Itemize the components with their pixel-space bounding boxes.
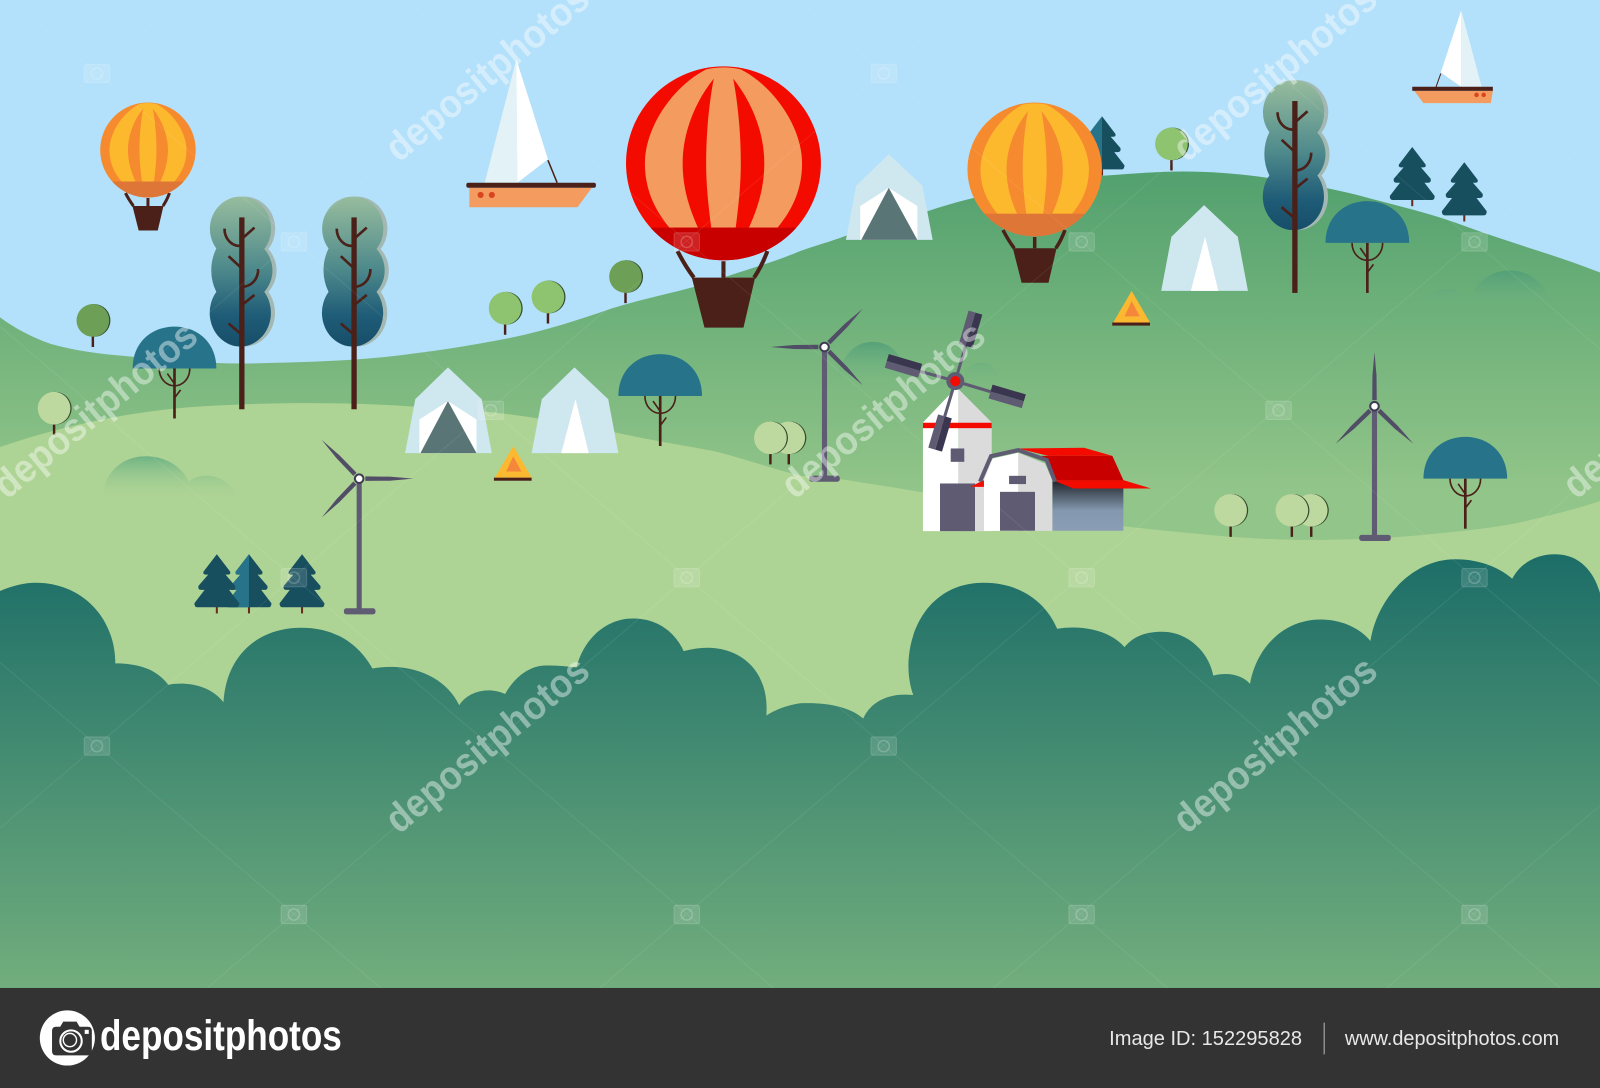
hull bbox=[1414, 91, 1493, 103]
wind turbine centre bbox=[770, 307, 864, 482]
sail bbox=[1441, 10, 1461, 87]
logo wordmark: depositphotos bbox=[100, 1012, 342, 1060]
wind turbine right bbox=[1334, 352, 1415, 541]
barn side wall bbox=[1052, 480, 1123, 531]
round tree bbox=[609, 260, 643, 303]
round tree front bbox=[1276, 494, 1309, 537]
windmill sails bbox=[885, 311, 1026, 452]
round tree bbox=[1214, 494, 1248, 537]
spruce trees: upper right group bbox=[1080, 116, 1487, 221]
round tree bbox=[1155, 128, 1189, 170]
watermark middle: depositphotos bbox=[773, 313, 994, 507]
parasol tree 2 bbox=[618, 354, 702, 446]
spruce bbox=[1390, 147, 1435, 206]
tent with dark door, lower left bbox=[405, 367, 492, 453]
barn red roof bbox=[970, 448, 1151, 488]
spruce left bbox=[194, 554, 239, 613]
hot air balloon: medium orange bbox=[967, 103, 1102, 283]
website url: www.depositphotos.com bbox=[1344, 1028, 1559, 1050]
watermark bottom right: depositphotos bbox=[1164, 648, 1386, 842]
spruce middle bbox=[227, 554, 271, 613]
campfire right bbox=[1112, 291, 1150, 326]
footer bar bbox=[0, 988, 1600, 1088]
sailboat small bbox=[1412, 10, 1493, 103]
foreground forest silhouette bbox=[0, 554, 1600, 988]
wind turbine left bbox=[320, 438, 413, 614]
parasol tree 4 bbox=[1423, 437, 1507, 529]
round tree bbox=[77, 304, 110, 347]
round tree back bbox=[772, 422, 806, 464]
spruce hidden behind balloon bbox=[1080, 116, 1124, 176]
round tree bbox=[532, 281, 566, 324]
barn front gable bbox=[980, 450, 1055, 531]
tent, lower left bbox=[532, 367, 618, 453]
watermark bottom centre: depositphotos bbox=[377, 648, 598, 842]
round tree bbox=[38, 392, 72, 435]
campfire left bbox=[494, 446, 532, 481]
front hill bbox=[0, 403, 1600, 817]
poplar tree 1 bbox=[210, 197, 277, 409]
poplar tree 3 bbox=[1263, 80, 1330, 293]
small round trees bbox=[38, 128, 1329, 537]
mound: centre bbox=[837, 342, 1001, 380]
round tree back bbox=[1295, 494, 1329, 537]
back hill bbox=[0, 171, 1600, 572]
image id: Image ID: 152295828 bbox=[1109, 1028, 1302, 1050]
sail bbox=[485, 59, 517, 183]
mound: left bbox=[102, 456, 240, 502]
watermark camera icons bbox=[84, 64, 1487, 924]
background mounds bbox=[102, 270, 1551, 502]
watermark text bbox=[0, 0, 1600, 842]
spruce trees: lower left group bbox=[194, 554, 324, 613]
spruce right bbox=[280, 554, 324, 613]
parasol tree 1 bbox=[133, 327, 216, 418]
tent with dark door, upper bbox=[846, 154, 933, 240]
round tree front bbox=[754, 422, 788, 464]
windmill tower bbox=[923, 389, 992, 531]
spruce bbox=[1442, 162, 1487, 221]
sailboat large bbox=[466, 59, 596, 207]
hull bbox=[469, 188, 592, 207]
mound: right bbox=[1418, 270, 1551, 308]
windmill and barn bbox=[885, 311, 1151, 531]
tent, upper right bbox=[1161, 205, 1248, 291]
parasol tree 3 bbox=[1326, 201, 1409, 293]
poplar tree 2 bbox=[322, 197, 389, 409]
logo icon: camera bbox=[40, 1010, 95, 1066]
round tree bbox=[489, 292, 523, 335]
hot air balloon: small yellow bbox=[100, 103, 196, 231]
hot air balloon: large red bbox=[626, 66, 821, 328]
